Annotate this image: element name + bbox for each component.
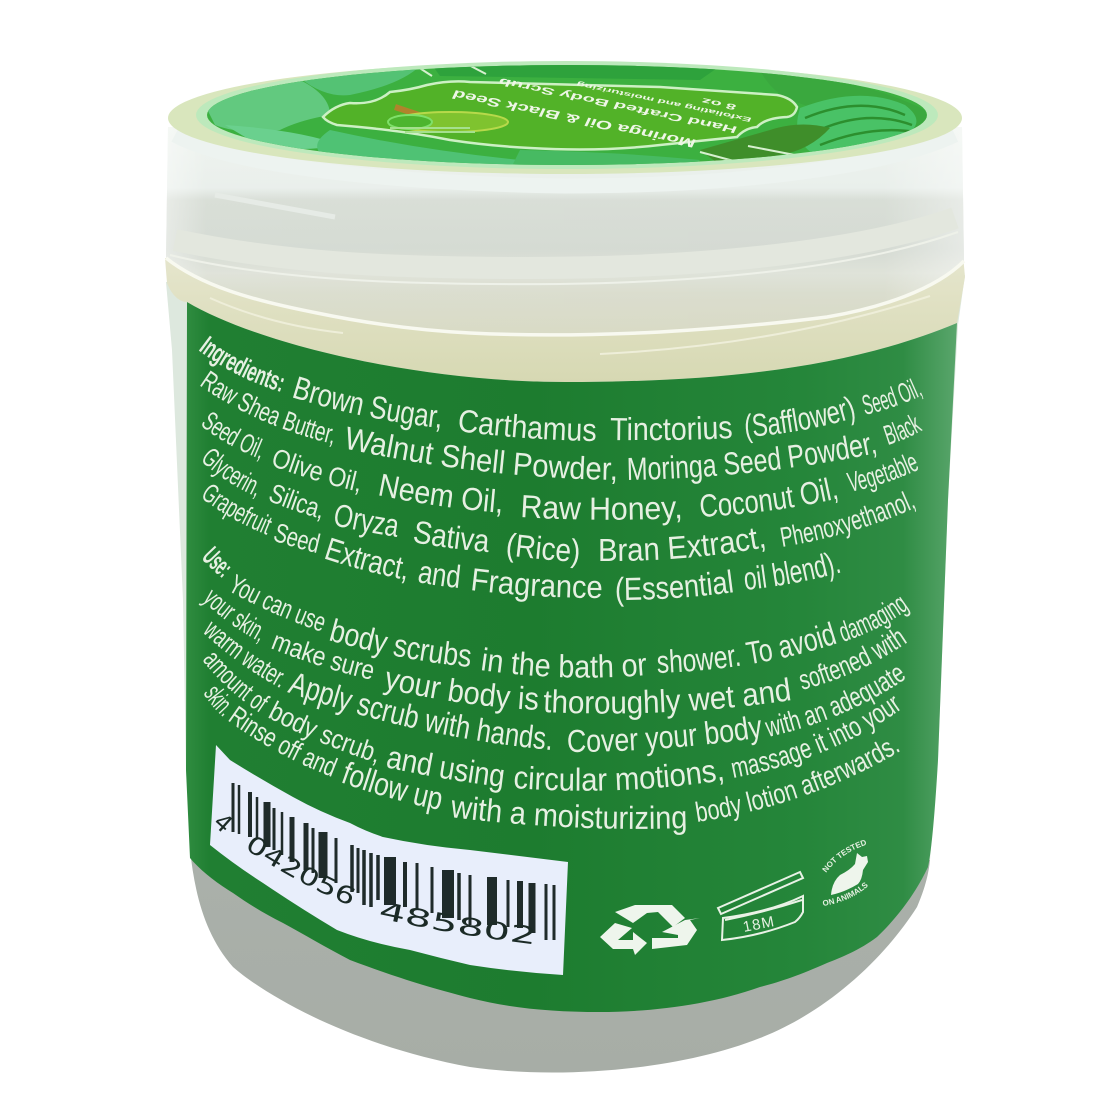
directions for use text block: softened with [795, 621, 911, 696]
ingredients text block: Bran Extract, [600, 528, 765, 561]
icon: not tested on animals rabbit: NOT TESTED [821, 838, 868, 874]
directions for use text block: make sure [272, 635, 374, 679]
upside-down product name [450, 76, 753, 150]
ingredients text block [198, 336, 924, 607]
directions for use text block: shower. To avoid [658, 621, 836, 674]
sticker artwork [207, 65, 927, 165]
ingredients text block: Seed Oil, [862, 378, 924, 414]
lid sticker [168, 59, 962, 174]
barcode digits: 4 [208, 808, 238, 839]
green back label [186, 302, 957, 1012]
ingredients text block: Phenoxyethanol, [780, 491, 916, 547]
directions for use text block [198, 546, 910, 835]
directions for use text block: body scrub, [264, 696, 385, 769]
ingredients text block: Extract, [325, 538, 406, 584]
directions for use text block: circular motions, [513, 751, 726, 798]
ingredients text block: (Rice) [508, 532, 578, 568]
ingredients text block: Brown Sugar, [293, 376, 440, 432]
barcode bars [233, 783, 554, 940]
directions for use text block: with a moisturizing [448, 788, 688, 836]
directions for use text block: body scrubs [330, 618, 470, 667]
ingredients text block: Carthamus [460, 410, 596, 442]
directions for use text block: You can use [232, 574, 324, 631]
directions for use text block: Use: [203, 546, 230, 578]
ingredients text block: Neem Oil, [379, 474, 500, 517]
directions for use text block: Rinse off and [224, 700, 341, 783]
screw cap side [166, 127, 964, 335]
upside-down product name: Moringa Oil & Black Seed [450, 87, 698, 150]
upside-down product name: Exfoliating and moisturizing [575, 80, 753, 123]
ingredients text block: Grapefruit [203, 484, 272, 535]
ingredients text block: Oryza [335, 504, 398, 538]
ingredients text block: Olive Oil, [273, 450, 359, 495]
directions for use text block: in the bath or [482, 647, 646, 678]
directions for use text block: Cover your body [567, 708, 764, 759]
ingredients text block: Black [883, 414, 923, 445]
jar body [166, 275, 965, 860]
upside-down product name: Hand Crafted Body Scrub [496, 76, 739, 135]
ingredients text block: Glycerin, [203, 449, 257, 500]
ingredients text block: (Safflower) [746, 396, 855, 444]
barcode digits: 485802 [377, 896, 538, 950]
icon: not tested on animals rabbit [822, 840, 868, 906]
ingredients text block: and [418, 564, 460, 588]
sticker centre plaque [323, 81, 797, 149]
directions for use text block: thoroughly wet and [544, 677, 790, 720]
ingredients text block: Ingredients: [198, 336, 284, 392]
barcode digits [216, 816, 532, 944]
directions for use text block: skin. [198, 680, 240, 722]
directions for use text block: warm water. [198, 614, 292, 694]
directions for use text block: follow up [338, 755, 446, 817]
icon: 18 month jar [718, 872, 803, 940]
ingredients text block: Raw Shea Butter, [200, 370, 333, 447]
ingredients text block: Raw Honey, [522, 495, 680, 526]
ingredients text block: Coconut Oil, [700, 477, 838, 517]
directions for use text block: with an adequate [762, 657, 910, 743]
ingredients text block: Silica, [270, 484, 321, 522]
barcode digits: 042056 [241, 830, 360, 912]
ingredients text block: Moringa Seed Powder, [628, 436, 876, 484]
icon: not tested on animals rabbit: ON ANIMALS [822, 880, 870, 908]
directions for use text block: your body is [382, 672, 538, 714]
upside-down product name: 8 oz [700, 96, 738, 112]
barcode sticker [210, 745, 568, 975]
directions for use text block: your skin, [198, 590, 262, 644]
logo on plaque [388, 107, 508, 132]
directions for use text block: damaging [840, 596, 910, 642]
directions for use text block: Apply scrub with hands. [285, 665, 555, 757]
icon: 18 month jar: 18M [742, 913, 776, 936]
ingredients text block: Seed Oil, [202, 412, 263, 462]
jar base [190, 850, 930, 1073]
ingredients text block: oil blend). [744, 552, 840, 590]
directions for use text block: massage it into your [728, 688, 906, 784]
cream neck band [165, 255, 965, 382]
icon: recycling symbol [600, 905, 700, 955]
directions for use text block: body lotion afterwards. [693, 729, 904, 828]
ingredients text block: Sativa [414, 521, 488, 552]
directions for use text block: amount of [197, 645, 274, 718]
directions for use text block: and using [384, 739, 507, 794]
ingredients text block: Fragrance [472, 568, 602, 602]
ingredients text block: Seed [274, 524, 320, 553]
ingredients text block: Walnut Shell Powder, [348, 426, 616, 484]
product jar photograph [165, 61, 965, 1072]
ingredients text block: Tinctorius [610, 416, 732, 440]
lid rim [168, 62, 962, 174]
ingredients text block: Vegetable [846, 454, 918, 492]
ingredients text block: (Essential [616, 569, 733, 607]
